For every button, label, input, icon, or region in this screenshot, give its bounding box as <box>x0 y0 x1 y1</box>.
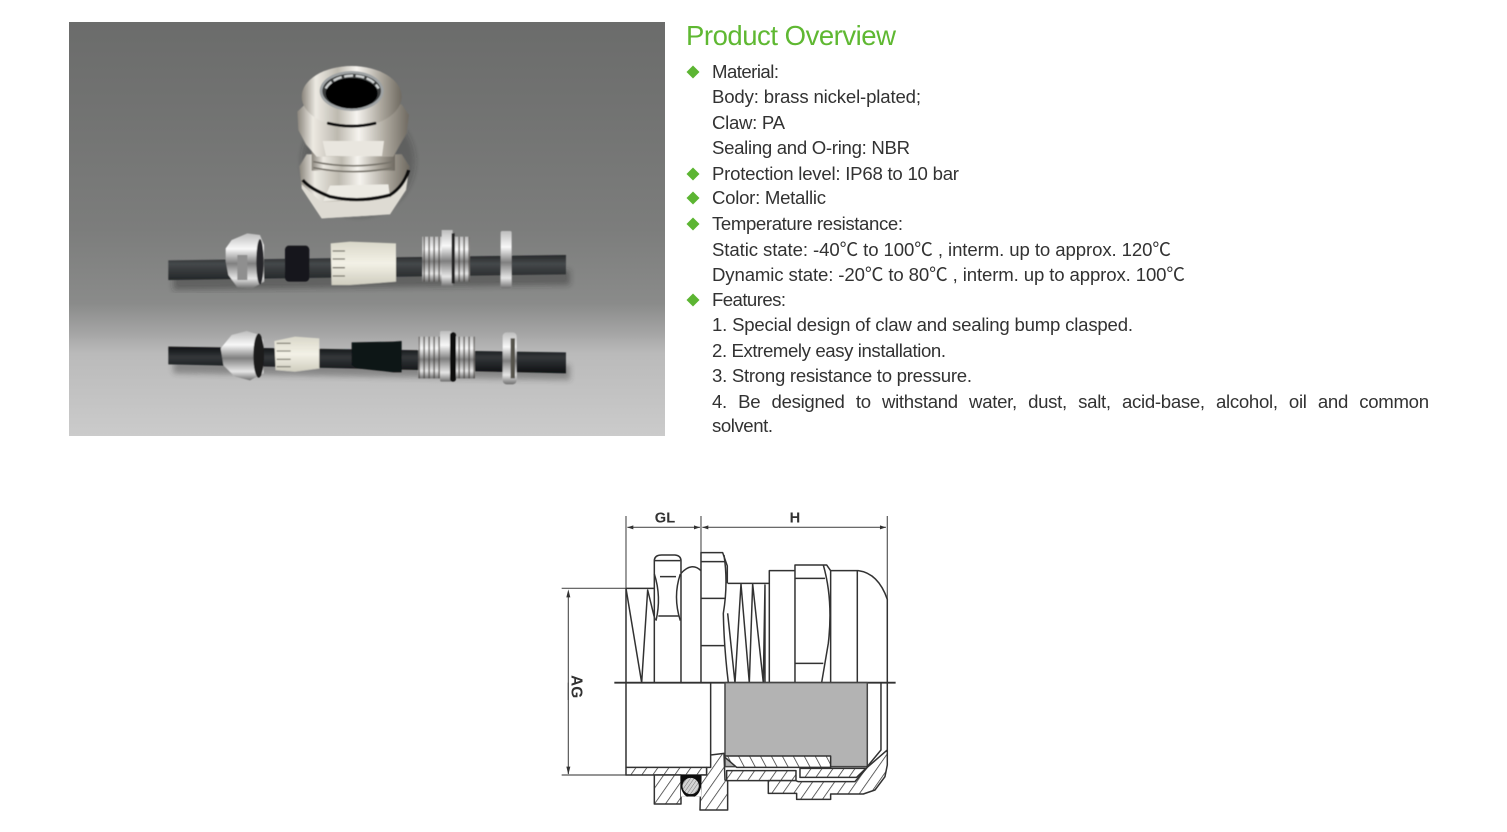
text block: specifications list <box>686 61 1429 436</box>
panel: product photo <box>69 22 665 436</box>
icon: bullet diamond <box>686 168 700 180</box>
text block: specifications list: Material: <box>712 61 779 82</box>
upper half: external view <box>562 511 896 700</box>
icon: bullet diamond <box>686 218 700 230</box>
chart: cable gland dimension drawing <box>562 511 896 810</box>
text block: specifications list: Claw: PA <box>712 112 786 133</box>
text block: specifications list: Sealing and O-ring: NBR <box>712 137 910 158</box>
icon: bullet diamond <box>686 192 700 204</box>
icon: O-ring <box>681 775 701 797</box>
icon: disassembled gland parts, upper row <box>168 230 570 290</box>
text block: specifications list: 1. Special design of claw and sealing bump clasped. <box>712 314 1133 335</box>
text block: specifications list: Color: Metallic <box>712 187 826 208</box>
text block: specifications list: 4. Be designed to withstand water, dust, salt, acid-base, alcohol, oil and common <box>712 391 1429 412</box>
icon: bullet diamond <box>686 66 700 78</box>
label: AG: AG <box>568 675 585 698</box>
text block: specifications list: Features: <box>712 289 786 310</box>
lower half: cross section <box>562 675 887 810</box>
icon: disassembled gland parts, lower row <box>168 331 570 384</box>
text block: specifications list: Dynamic state: -20℃ to 80℃ , interm. up to approx. 100℃ <box>712 264 1185 285</box>
hatched body sections <box>626 750 887 810</box>
text block: specifications list: Static state: -40℃ to 100℃ , interm. up to approx. 120℃ <box>712 239 1171 260</box>
icon: assembled cable gland <box>297 66 415 218</box>
text block: specifications list: Body: brass nickel-plated; <box>712 86 921 107</box>
text block: specifications list: Protection level: IP68 to 10 bar <box>712 163 959 184</box>
dimension lines: GL and H <box>562 516 887 700</box>
text block: specifications list: 2. Extremely easy installation. <box>712 340 946 361</box>
gland outline <box>626 555 681 683</box>
label: GL: GL <box>655 511 675 527</box>
text block: specifications list: solvent. <box>712 415 773 436</box>
text block: specifications list: Temperature resistance: <box>712 213 903 234</box>
text block: specifications list: 3. Strong resistance to pressure. <box>712 365 972 386</box>
heading: Product Overview: Product Overview <box>686 20 896 51</box>
icon: bullet diamond <box>686 294 700 306</box>
label: H: H <box>790 511 800 527</box>
